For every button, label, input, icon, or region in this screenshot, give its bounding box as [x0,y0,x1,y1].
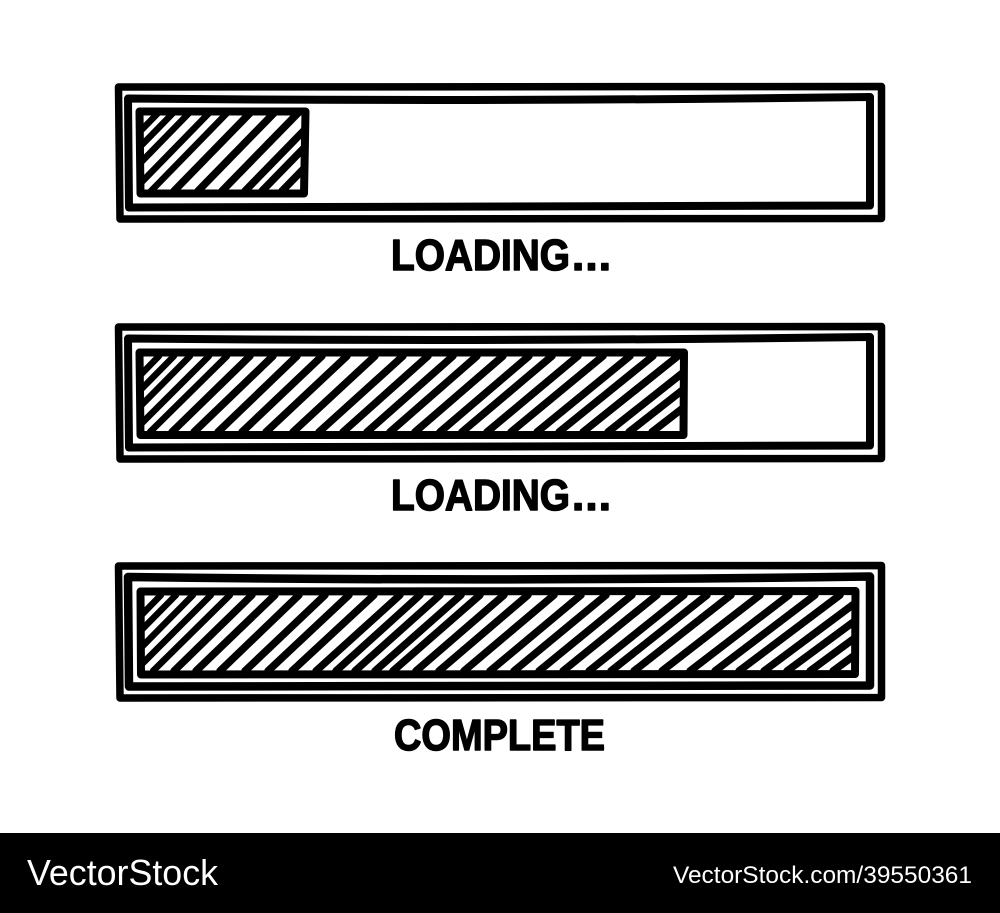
footer logo text: VectorStock [27,852,219,893]
hatched fill [85,352,750,435]
label: loading: ... [572,231,611,280]
bar outer frame [118,566,882,698]
progress bar: about 20 percent [82,86,882,219]
footer image id: VectorStock.com/39550361 [673,862,972,889]
hatched fill [136,108,310,198]
bar outer frame [118,326,882,459]
label: loading: LOADING [391,231,570,280]
bar outer frame [118,86,882,219]
label: loading: LOADING [391,471,570,520]
bar inner frame [128,337,870,448]
progress bar: complete [87,566,937,698]
footer band [0,833,1000,913]
label: complete: COMPLETE [394,711,605,760]
bar inner frame [128,97,870,208]
bar inner frame [128,576,870,686]
label: loading: ... [572,471,611,520]
hatched fill [87,591,937,674]
progress bar: about 70 percent [85,326,882,459]
